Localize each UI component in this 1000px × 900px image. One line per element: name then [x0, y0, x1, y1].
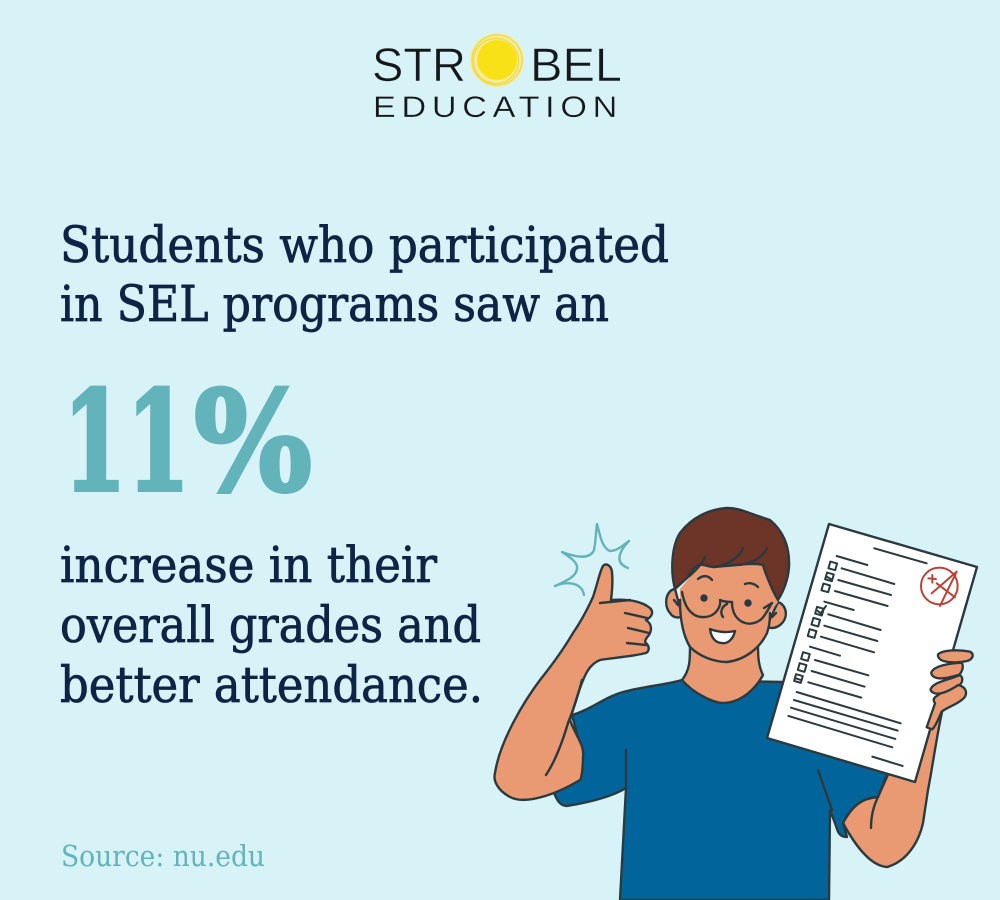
big statistic: 11%: 11	[63, 360, 190, 523]
paper	[767, 524, 977, 782]
source note: Source: nu.edu	[61, 839, 265, 873]
ears	[666, 589, 682, 617]
arm: right holding paper	[843, 700, 942, 867]
red A+ grade	[921, 568, 958, 606]
logo: Strobel Education	[372, 33, 623, 124]
hair	[672, 508, 789, 600]
glasses and nose	[682, 592, 772, 624]
neck	[682, 643, 763, 703]
text block: outcome: overall grades and	[60, 596, 481, 654]
text block: outcome: better attendance.	[60, 656, 483, 714]
text block: outcome: increase in their	[60, 536, 437, 594]
face	[680, 565, 778, 662]
text block: outcome	[60, 536, 483, 714]
smile	[710, 629, 735, 643]
hand creases	[546, 600, 649, 775]
heading: intro text	[60, 216, 669, 333]
icon: yellow sun	[470, 33, 524, 87]
logo: Strobel Education: EDUCATION	[373, 91, 623, 124]
heading: intro text: Students who participated	[60, 216, 669, 274]
heading: intro text: in SEL programs saw an	[60, 275, 609, 333]
fingers	[927, 650, 973, 729]
logo: Strobel Education: STR	[372, 38, 466, 91]
t-shirt	[554, 680, 900, 900]
icon: sparkle burst	[555, 524, 629, 595]
checkboxes	[794, 562, 837, 683]
eyes and brows	[700, 594, 708, 602]
big statistic: 11%: %	[194, 360, 312, 523]
logo: Strobel Education: BEL	[530, 38, 622, 91]
paper lines	[788, 548, 958, 766]
arm: left raised with thumbs up	[495, 565, 652, 800]
illustration: student with graded paper	[495, 508, 977, 900]
